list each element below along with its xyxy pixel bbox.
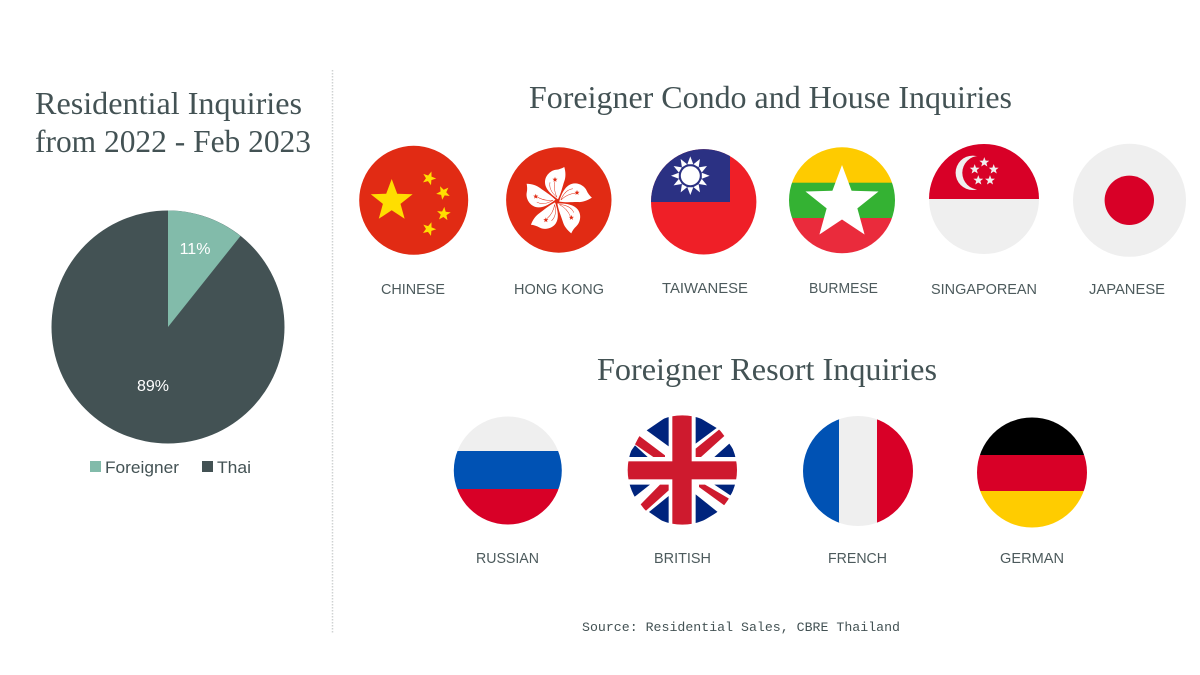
legend: Foreigner [105,458,179,477]
heading: residential inquiries: from 2022 - Feb 2023 [35,123,311,159]
label: Hong Kong: HONG KONG [514,281,604,298]
heading: resort inquiries: Foreigner Resort Inquiries [597,351,937,387]
flag: Myanmar [788,146,896,255]
label: Chinese: CHINESE [381,281,445,298]
panel: condo and house inquiries [359,79,1186,298]
pie chart: 89% [137,378,169,395]
panel: resort inquiries [452,351,1088,567]
legend: Thai [217,458,251,477]
source note: Source: Residential Sales, CBRE Thailand [582,620,900,635]
label: Japanese: JAPANESE [1089,281,1165,298]
flag: Russia [452,415,564,526]
flag: France [802,415,915,527]
flag: Singapore [928,143,1040,255]
flag: China [359,146,468,255]
flag: United Kingdom [628,415,737,525]
legend [90,458,251,477]
label: British: BRITISH [654,550,711,567]
pie chart: 11% [180,241,210,258]
flag: Hong Kong [506,147,612,253]
label: Russian: RUSSIAN [476,550,539,567]
label: Singaporean: SINGAPOREAN [931,281,1037,298]
label: Burmese: BURMESE [809,280,878,297]
label: German: GERMAN [1000,550,1064,567]
flag: Germany [976,416,1088,529]
pie chart [52,210,284,444]
flag: Japan [1073,144,1186,257]
flag: Taiwan [650,148,758,256]
label: French: FRENCH [828,550,887,567]
heading: condo and house: Foreigner Condo and House Inquiries [529,79,1012,115]
heading: residential inquiries: Residential Inquiries [35,85,302,121]
label: Taiwanese: TAIWANESE [662,280,748,297]
panel: residential inquiries [35,85,311,477]
